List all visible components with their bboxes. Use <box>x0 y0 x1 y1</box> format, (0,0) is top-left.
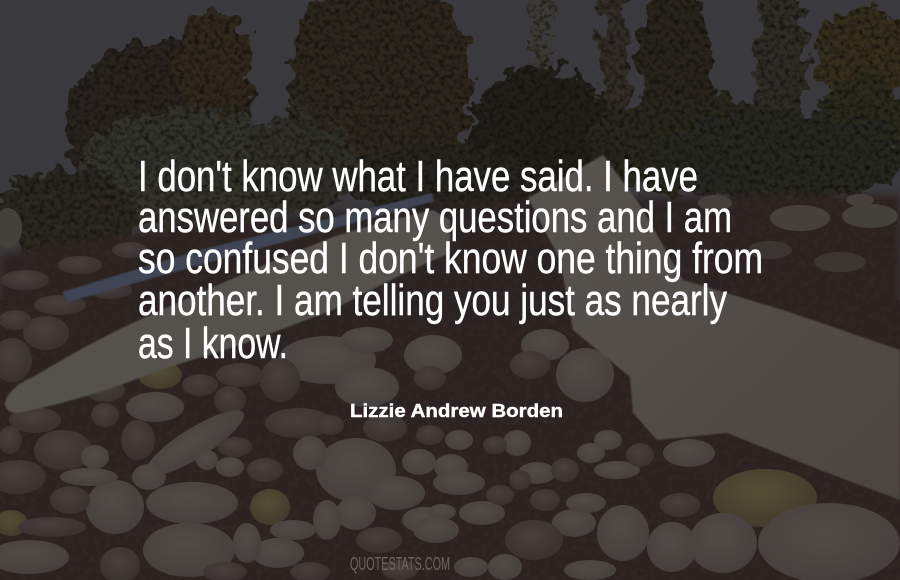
quote text <box>138 152 763 368</box>
author name: Lizzie Andrew Borden <box>350 401 563 421</box>
quote text: answered so many questions and I am <box>138 193 732 242</box>
surfboard: pale hull <box>5 210 450 413</box>
background: sky <box>0 0 900 300</box>
surfboard: blue stripe <box>62 193 434 302</box>
watermark: QUOTESTATS.COM <box>350 554 450 574</box>
quote text: so confused I don't know one thing from <box>138 234 763 283</box>
driftwood log <box>528 155 900 500</box>
background: trees and bushes <box>0 0 900 260</box>
quote text: another. I am telling you just as nearly <box>138 276 727 325</box>
background: stones <box>0 242 900 580</box>
quote text: I don't know what I have said. I have <box>138 152 698 201</box>
background: rocky ground <box>0 194 900 580</box>
quote text: as I know. <box>138 319 288 368</box>
